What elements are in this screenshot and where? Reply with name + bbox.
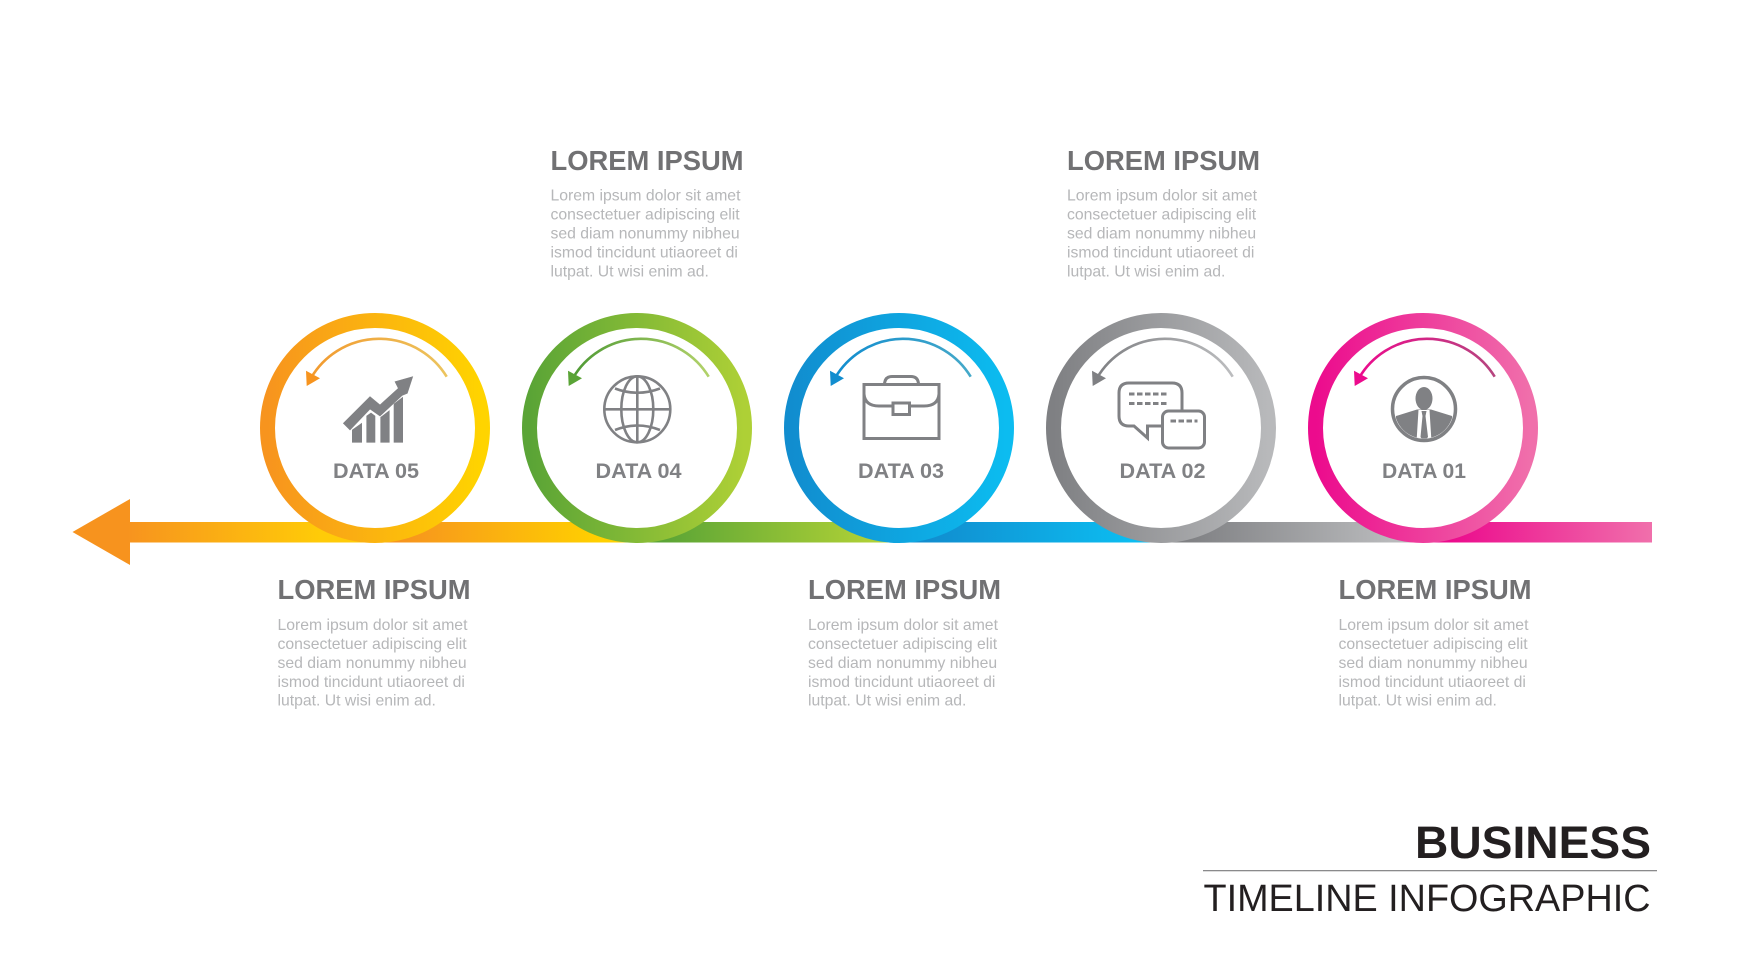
body text xyxy=(1338,617,1529,710)
icon: businessman xyxy=(1392,378,1456,445)
curved arrow xyxy=(306,339,447,386)
heading: LOREM IPSUM xyxy=(808,574,1001,605)
panel: data 05 circle xyxy=(268,320,482,536)
ring xyxy=(792,320,1006,536)
ring xyxy=(1054,320,1268,536)
panel: data 02 circle xyxy=(1054,320,1268,536)
body text: lutpat. Ut wisi enim ad. xyxy=(808,693,966,710)
body text: Lorem ipsum dolor sit amet xyxy=(278,617,468,634)
subtitle: timeline infographic: TIMELINE INFOGRAPHIC xyxy=(1204,878,1650,920)
body text: lutpat. Ut wisi enim ad. xyxy=(550,264,709,280)
bar segment: data 03 xyxy=(899,522,1161,542)
body text: Lorem ipsum dolor sit amet xyxy=(808,617,999,634)
title: business: BUSINESS xyxy=(1415,817,1651,868)
icon: rising bar chart xyxy=(343,377,413,442)
body text: consectetuer adipiscing elit xyxy=(1067,207,1257,224)
body text: sed diam nonummy nibheu xyxy=(808,655,997,672)
curved arrow xyxy=(568,339,709,386)
bar segment: data 02 xyxy=(1161,522,1423,542)
body text: consectetuer adipiscing elit xyxy=(1338,636,1528,653)
body text: Lorem ipsum dolor sit amet xyxy=(1338,617,1529,634)
text block: top, data 02 xyxy=(1067,145,1260,280)
label: DATA 01 xyxy=(1382,460,1466,483)
label: DATA 04 xyxy=(596,460,682,483)
body text: sed diam nonummy nibheu xyxy=(1338,655,1528,672)
ring xyxy=(530,320,744,536)
bar segment: data 04 xyxy=(637,522,899,542)
label: DATA 05 xyxy=(333,460,419,483)
body text xyxy=(1067,188,1258,280)
body text: lutpat. Ut wisi enim ad. xyxy=(1338,693,1497,710)
heading: LOREM IPSUM xyxy=(1338,574,1532,605)
body text: ismod tincidunt utiaoreet di xyxy=(808,674,995,691)
ring xyxy=(1316,320,1530,536)
body text: Lorem ipsum dolor sit amet xyxy=(550,188,741,205)
body text: ismod tincidunt utiaoreet di xyxy=(550,244,738,262)
panel: data 04 circle xyxy=(530,320,744,536)
body text: sed diam nonummy nibheu xyxy=(278,655,467,672)
panel: data 01 circle xyxy=(1316,320,1530,536)
curved arrow xyxy=(1354,339,1495,386)
icon: speech bubbles xyxy=(1119,383,1204,448)
label: DATA 03 xyxy=(858,460,944,483)
body text: ismod tincidunt utiaoreet di xyxy=(278,674,465,691)
label: DATA 02 xyxy=(1120,460,1206,483)
text block: bottom, data 05 xyxy=(278,574,470,710)
heading: LOREM IPSUM xyxy=(550,145,744,176)
body text: consectetuer adipiscing elit xyxy=(550,207,740,224)
body text xyxy=(808,617,999,710)
text block: bottom, data 01 xyxy=(1338,574,1532,710)
body text: ismod tincidunt utiaoreet di xyxy=(1067,244,1254,262)
text block: top, data 04 xyxy=(550,145,744,280)
heading: LOREM IPSUM xyxy=(278,574,470,605)
text block: bottom, data 03 xyxy=(808,574,1001,710)
icon: globe xyxy=(604,376,670,442)
heading: LOREM IPSUM xyxy=(1067,145,1260,176)
timeline arrow bar xyxy=(72,499,1652,565)
ring xyxy=(268,320,482,536)
icon: briefcase xyxy=(864,376,939,438)
body text xyxy=(550,188,741,280)
curved arrow xyxy=(1092,339,1233,386)
bar segment: data 01 xyxy=(1423,522,1652,542)
arrowhead xyxy=(72,499,130,565)
body text: Lorem ipsum dolor sit amet xyxy=(1067,188,1258,205)
body text: ismod tincidunt utiaoreet di xyxy=(1338,674,1526,691)
body text: consectetuer adipiscing elit xyxy=(808,636,998,653)
body text xyxy=(278,617,468,710)
bar segment: orange lead-in xyxy=(129,522,375,542)
title xyxy=(1203,817,1657,920)
body text: lutpat. Ut wisi enim ad. xyxy=(1067,264,1225,280)
body text: lutpat. Ut wisi enim ad. xyxy=(278,693,436,710)
body text: sed diam nonummy nibheu xyxy=(1067,226,1256,243)
body text: sed diam nonummy nibheu xyxy=(550,226,740,243)
body text: consectetuer adipiscing elit xyxy=(278,636,467,653)
curved arrow xyxy=(830,339,971,386)
bar segment: data 05 xyxy=(375,522,637,542)
panel: data 03 circle xyxy=(792,320,1006,536)
